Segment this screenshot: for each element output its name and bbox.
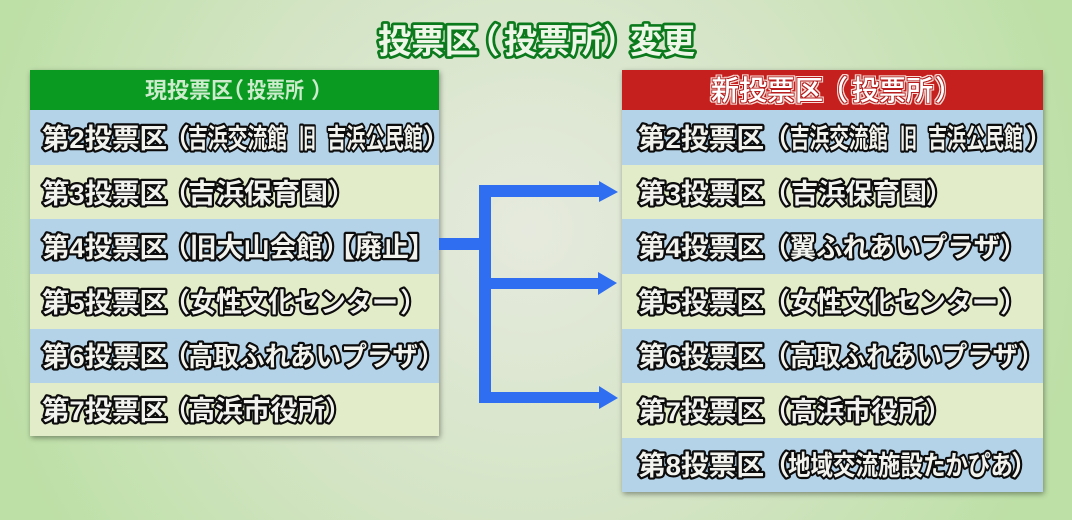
panel: current polling districts [30,70,450,436]
right row: district 5: ） [1000,288,1027,318]
left header: 投票所 [247,78,304,103]
right row: district 6: ） [1018,342,1045,372]
right row: district 6: （ [763,342,790,372]
title: 投票所 [504,23,603,61]
left row: district 6: 高取ふれあいプラザ [188,342,418,372]
left header: 現投票区 [145,78,233,103]
right row: district 2: 吉浜交流館 [790,124,888,154]
right header: （ [820,75,848,106]
right header: 新投票区 [711,75,823,106]
right header: ） [935,75,963,106]
title: （ [466,23,500,61]
right row: district 3: ） [926,179,953,209]
left row: district 7: 第7投票区 [42,396,167,426]
title: 変更 [630,23,695,61]
right row: district 5 [622,274,1043,329]
left row: district 5 [30,274,439,329]
right row: district 2: ） [1026,124,1053,154]
right row: district 6 [622,329,1045,383]
right row: district 7: ） [925,397,952,427]
right row: district 4 [622,219,1043,274]
left row: district 5: （ [163,288,190,318]
right row: district 5: 第5投票区 [638,288,764,318]
right row: district 3: 吉浜保育園 [791,179,927,209]
right row: district 2: 第2投票区 [638,124,764,154]
right row: district 3: （ [763,179,790,209]
left row: district 4 abolished: 】 [408,233,435,263]
left row: district 2: ） [423,124,450,154]
arrows: district 4 redistributed to districts 3, 5 and 7 [439,181,618,409]
right row: district 4: ） [1000,233,1027,263]
left row: district 2: 吉浜公民館 [327,124,423,154]
right header: 投票所 [852,75,933,106]
left row: district 3: （ [163,179,190,209]
left header [30,70,439,110]
right row: district 8 [622,438,1043,492]
left row: district 7: （ [163,396,190,426]
right row: district 2: （ [763,124,790,154]
right row: district 5: 女性文化センター [790,288,998,318]
title: ） [603,23,637,61]
right row: district 6: 第6投票区 [638,342,764,372]
right row: district 8: 地域交流施設たかぴあ [788,451,1013,481]
left row: district 5: 第5投票区 [42,288,167,318]
left row: district 4 abolished: 【 [328,233,355,263]
right row: district 6: 高取ふれあいプラザ [790,342,1018,372]
right row: district 2: 旧 [900,124,917,154]
left row: district 7 [30,383,439,436]
right row: district 4: （ [763,233,790,263]
left row: district 3: 第3投票区 [42,179,167,209]
title: 投票区 [378,23,478,61]
right row: district 3: 第3投票区 [638,179,764,209]
right row: district 8: （ [763,451,790,481]
left row: district 2: 旧 [299,124,316,154]
right row: district 7 [622,383,1043,438]
left row: district 6: 第6投票区 [42,342,167,372]
left row: district 5: 女性文化センター [190,288,398,318]
right row: district 3 [622,165,1043,219]
left row: district 4 abolished: ） [323,233,350,263]
left header: ） [311,78,333,103]
left row: district 4 abolished: 旧大山会館 [190,233,323,263]
right row: district 8: 第8投票区 [638,451,764,481]
left row: district 5: ） [400,288,427,318]
right header [622,70,1043,110]
right row: district 4: 翼ふれあいプラザ [790,233,1000,263]
left row: district 6 [30,329,445,383]
right row: district 2: 吉浜公民館 [928,124,1023,154]
left row: district 2 [30,110,450,165]
right row: district 7: 高浜市役所 [790,397,925,427]
right row: district 5: （ [763,288,790,318]
right row: district 7: 第7投票区 [638,397,764,427]
left row: district 3: ） [328,179,355,209]
left row: district 2: （ [163,124,190,154]
right row: district 8: ） [1011,451,1038,481]
title [378,23,695,61]
left row: district 2: 第2投票区 [42,124,167,154]
left row: district 7: ） [325,396,352,426]
left row: district 3: 吉浜保育園 [188,179,328,209]
left header: （ [222,78,244,103]
left row: district 7: 高浜市役所 [188,396,325,426]
panel: new polling districts [622,70,1053,492]
left row: district 4 abolished: 第4投票区 [42,233,167,263]
right row: district 4: 第4投票区 [638,233,764,263]
left row: district 2: 吉浜交流館 [188,124,287,154]
left row: district 4 abolished: 廃止 [355,233,409,263]
left row: district 4 abolished [30,219,439,274]
right row: district 2 [622,110,1053,165]
right row: district 7: （ [763,397,790,427]
left row: district 3 [30,165,439,219]
left row: district 6: ） [418,342,445,372]
left row: district 4 abolished: （ [163,233,190,263]
left row: district 6: （ [163,342,190,372]
